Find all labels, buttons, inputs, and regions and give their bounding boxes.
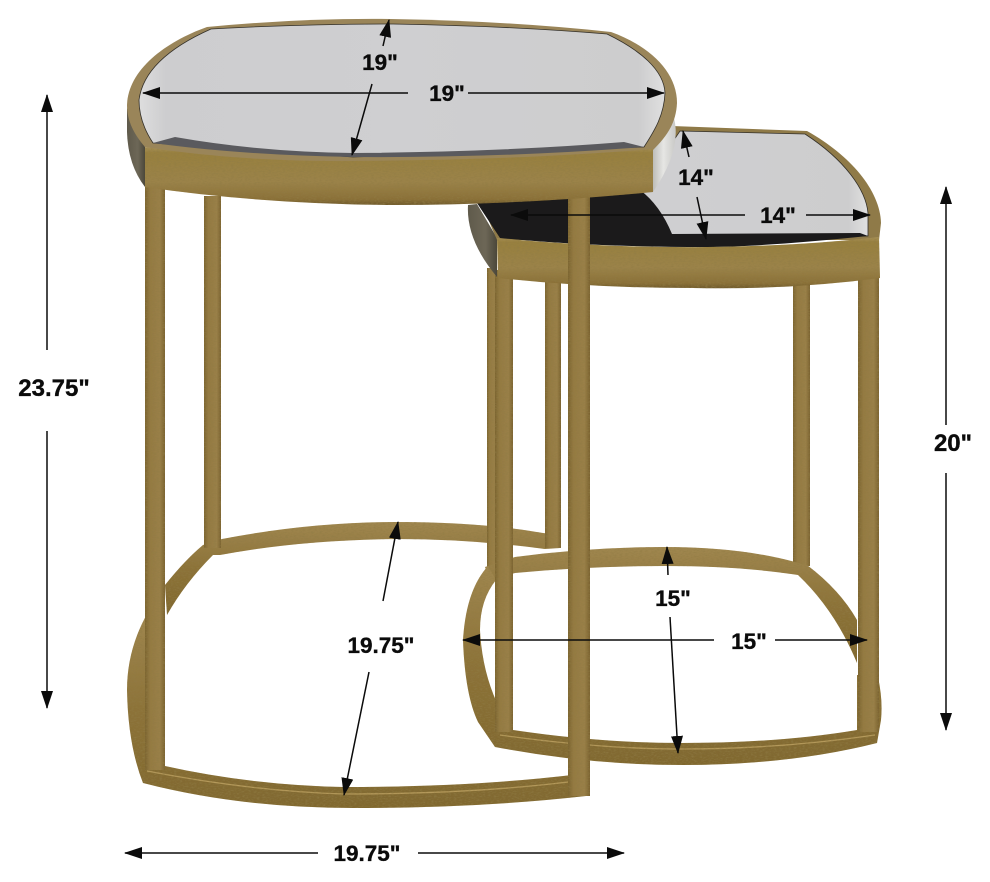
dimension: large base depth 19.75: 19.75" xyxy=(348,633,414,658)
dimension: large top depth 19: 19" xyxy=(362,50,398,75)
dimension: small base depth 15: 15" xyxy=(655,586,691,611)
large table: back base and rear legs xyxy=(165,196,561,615)
dimension: large base width 19.75: 19.75" xyxy=(334,841,400,866)
dimension: small top width 14: 14" xyxy=(760,203,796,228)
dimension: small top depth 14: 14" xyxy=(678,165,714,190)
large table: front base and front legs xyxy=(127,186,590,808)
dimension: large top width 19: 19" xyxy=(429,81,465,106)
dimension: small table height 20: 20" xyxy=(934,430,972,457)
dimension: small base depth 15 xyxy=(655,547,691,753)
dimension: small top depth 14 xyxy=(678,131,714,239)
dimension: small base width 15: 15" xyxy=(731,629,767,654)
dimension: large base depth 19.75 xyxy=(344,522,414,795)
large table: top with mirror xyxy=(127,19,677,205)
dimension: large top depth 19 xyxy=(352,20,398,155)
dimension: overall height 23.75: 23.75" xyxy=(18,375,90,402)
small table: top with mirror xyxy=(468,126,881,288)
small table: base and rear legs xyxy=(463,268,882,765)
